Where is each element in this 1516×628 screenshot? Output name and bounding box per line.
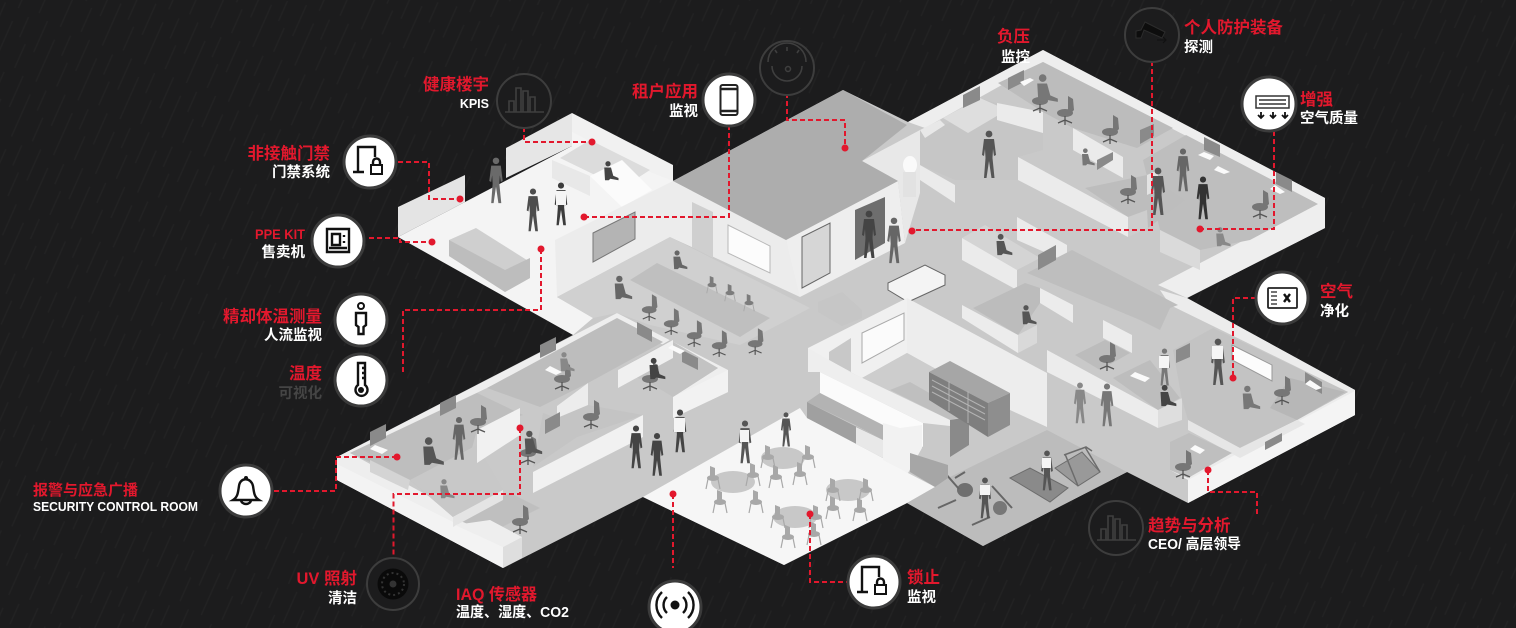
icon: air purifier bbox=[1256, 272, 1308, 324]
callout: contactless access bbox=[248, 136, 464, 202]
people bbox=[453, 131, 1225, 518]
callout: body temperature and people flow bbox=[223, 246, 544, 372]
icon: CCTV camera bbox=[1125, 8, 1179, 62]
roof bbox=[673, 90, 907, 240]
callout: PPE detection: 探测 bbox=[1184, 39, 1213, 56]
icon: signal waves bbox=[649, 581, 701, 628]
icon: bell bbox=[220, 465, 272, 517]
callout: trends and analysis bbox=[1089, 466, 1257, 555]
callout: air purification: 空气 bbox=[1320, 281, 1354, 301]
callout: alarm and emergency broadcast: 报警与应急广播 bbox=[33, 481, 138, 499]
main slab and corridor floor bbox=[337, 50, 1355, 568]
meeting room floor bbox=[557, 237, 810, 345]
icon: UV lamp bbox=[367, 558, 419, 610]
callout: trends and analysis: CEO/ 高层领导 bbox=[1148, 535, 1241, 553]
callout: negative pressure bbox=[997, 27, 1030, 66]
icon: smartphone bbox=[703, 74, 755, 126]
callout: contactless access: 非接触门禁 bbox=[248, 144, 330, 163]
kitchen counter bbox=[807, 393, 883, 458]
callout: body temperature and people flow: 人流监视 bbox=[264, 326, 322, 344]
central room walls bbox=[673, 130, 920, 297]
callout: sensor beacon bbox=[649, 490, 701, 628]
callout: temperature: 温度 bbox=[289, 364, 322, 383]
callout: IAQ sensor: IAQ 传感器 bbox=[456, 584, 537, 604]
gym equipment bbox=[938, 447, 1100, 525]
callout: PPE kit vending: 售卖机 bbox=[262, 243, 305, 261]
cafeteria tables and chairs bbox=[706, 445, 873, 548]
callout: tenant app: 监视 bbox=[669, 103, 698, 120]
lower right rooms bbox=[1170, 328, 1348, 478]
callout: temperature bbox=[278, 354, 387, 406]
callout: alarm and emergency broadcast bbox=[33, 454, 400, 517]
callout: lockdown: 监视 bbox=[907, 589, 936, 606]
lower left wing rooms bbox=[350, 318, 728, 547]
icon: bar chart bbox=[1089, 501, 1143, 555]
center reception room bbox=[818, 225, 1178, 330]
white shirts on figures bbox=[556, 191, 1223, 495]
callout: UV cleaning bbox=[296, 424, 524, 610]
callout: healthy building KPIs: KPIS bbox=[460, 97, 489, 111]
icon: person bbox=[335, 294, 387, 346]
callout: PPE kit vending bbox=[255, 215, 436, 267]
desks and monitors bbox=[370, 70, 1322, 450]
kitchen side counter bbox=[910, 453, 948, 487]
seated people bbox=[423, 74, 1260, 498]
partitions upper right bbox=[920, 103, 1200, 270]
kitchen walls bbox=[808, 298, 1047, 447]
callout: UV cleaning: UV 照射 bbox=[296, 569, 357, 588]
lobby walls bbox=[398, 113, 673, 237]
callout: air quality enhancement bbox=[1196, 77, 1358, 232]
callout: negative pressure: 负压 bbox=[997, 27, 1030, 46]
icon: door with lock bbox=[344, 136, 396, 188]
callout: air quality gauge bbox=[760, 41, 848, 152]
callout: healthy building KPIs: 健康楼宇 bbox=[423, 74, 489, 94]
upper right rooms bbox=[920, 62, 1318, 250]
water cooler bbox=[903, 156, 917, 197]
fridge bbox=[883, 423, 922, 473]
icon: gauge bbox=[760, 41, 814, 95]
callout: PPE detection: 个人防护装备 bbox=[1184, 17, 1284, 37]
icon: thermometer bbox=[335, 354, 387, 406]
callout: air quality enhancement: 增强 bbox=[1300, 90, 1334, 109]
isometric office floor plan bbox=[337, 50, 1355, 568]
callout: PPE detection bbox=[908, 8, 1284, 234]
gym floor bbox=[907, 430, 1127, 546]
callout: temperature: 可视化 bbox=[278, 384, 322, 402]
callout: IAQ sensor bbox=[456, 584, 569, 621]
office chairs bbox=[470, 84, 1291, 534]
icon: bar chart bbox=[497, 74, 551, 128]
kitchen island end wall bbox=[950, 417, 969, 457]
callout: trends and analysis: 趋势与分析 bbox=[1148, 515, 1230, 535]
storage racks bbox=[929, 361, 1010, 437]
callout: tenant app: 租户应用 bbox=[632, 81, 698, 101]
meeting table bbox=[630, 263, 770, 337]
callout: negative pressure: 监控 bbox=[1001, 48, 1030, 66]
callout: contactless access: 门禁系统 bbox=[272, 163, 330, 181]
callout: PPE kit vending: PPE KIT bbox=[255, 226, 305, 242]
icon: air vent bbox=[1242, 77, 1296, 131]
callout: air purification: 净化 bbox=[1320, 302, 1349, 320]
callout: tenant app bbox=[580, 74, 755, 220]
callout: air quality enhancement: 空气质量 bbox=[1300, 109, 1358, 127]
center right rooms bbox=[962, 283, 1182, 428]
icon: door with lock bbox=[848, 556, 900, 608]
lobby floor bbox=[398, 130, 692, 335]
whiteboard wall bbox=[555, 181, 692, 297]
callout: body temperature and people flow: 精却体温测量 bbox=[223, 307, 322, 326]
icon: vending machine bbox=[312, 215, 364, 267]
callout: healthy building KPIs bbox=[423, 74, 596, 146]
callout: lockdown bbox=[806, 510, 940, 608]
cafeteria floor bbox=[643, 408, 935, 565]
desk papers bbox=[370, 78, 1322, 454]
callout: IAQ sensor: 温度、湿度、CO2 bbox=[456, 603, 569, 621]
callout: air purification bbox=[1230, 272, 1354, 382]
sofa bbox=[449, 228, 530, 292]
callout: UV cleaning: 清洁 bbox=[328, 589, 357, 607]
callout: alarm and emergency broadcast: SECURITY CONTROL ROOM bbox=[33, 500, 198, 514]
callout: lockdown: 锁止 bbox=[907, 568, 940, 587]
outer rims and side faces bbox=[337, 50, 1355, 568]
